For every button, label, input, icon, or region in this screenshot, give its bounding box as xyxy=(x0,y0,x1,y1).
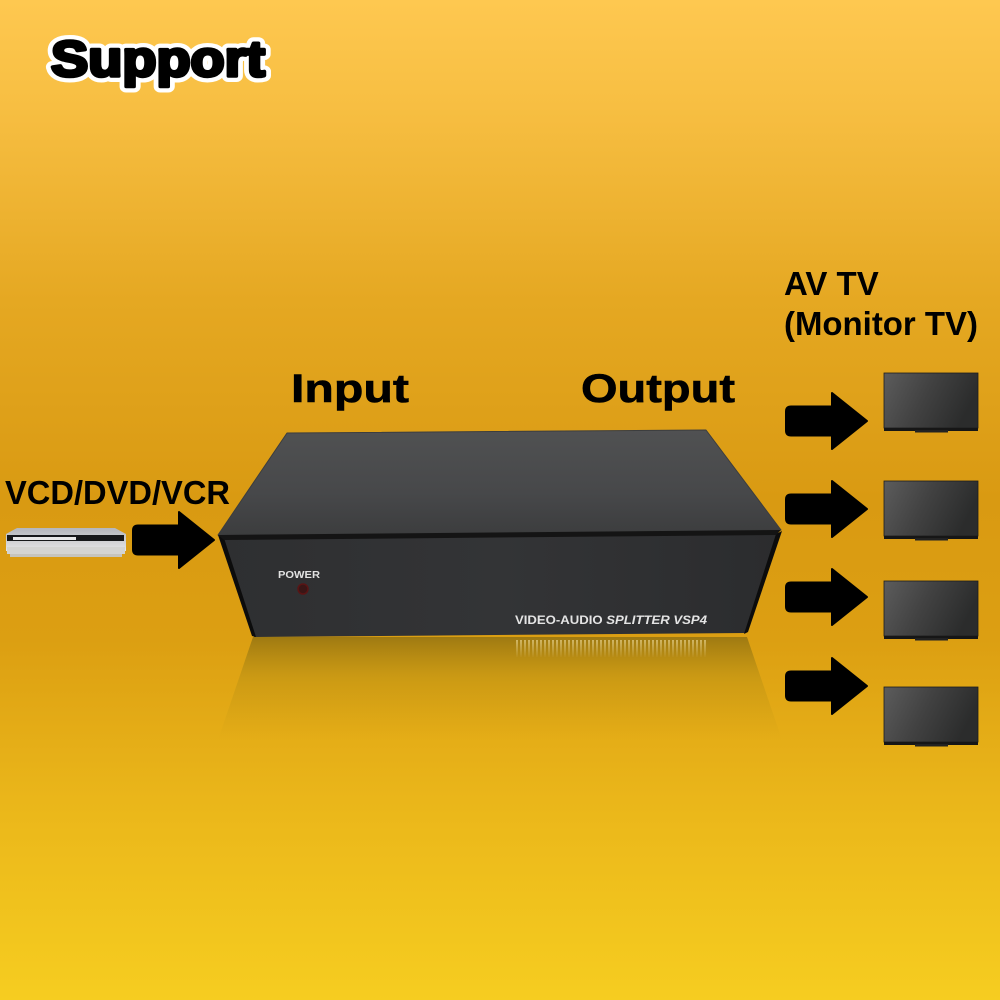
model label: VIDEO-AUDIO SPLITTER VSP4 xyxy=(515,615,708,627)
tv 1 xyxy=(884,373,978,432)
label: output display: (Monitor TV) xyxy=(784,305,978,342)
label: output display xyxy=(784,265,978,342)
arrow: source to splitter xyxy=(133,512,214,568)
tv 3 xyxy=(884,581,978,640)
title: Support xyxy=(51,31,265,87)
arrow: output 3 xyxy=(786,569,867,625)
icon: DVD player xyxy=(6,528,126,557)
power label: POWER xyxy=(278,569,320,581)
splitter box xyxy=(218,430,782,637)
arrow: output 1 xyxy=(786,393,867,449)
label: source devices: VCD/DVD/VCR xyxy=(5,475,230,512)
front face xyxy=(220,533,780,637)
arrow: output 4 xyxy=(786,658,867,714)
label: output: Output xyxy=(581,367,735,411)
reflected model label xyxy=(515,640,707,657)
label: output display: AV TV xyxy=(784,265,879,302)
title: Support xyxy=(51,31,265,87)
top face xyxy=(218,430,781,535)
side edges xyxy=(218,535,256,637)
power led xyxy=(298,584,308,594)
arrow: output 2 xyxy=(786,481,867,537)
tv 4 xyxy=(884,687,978,746)
tv 2 xyxy=(884,481,978,540)
label: input: Input xyxy=(291,367,409,411)
reflection of splitter xyxy=(218,637,782,740)
